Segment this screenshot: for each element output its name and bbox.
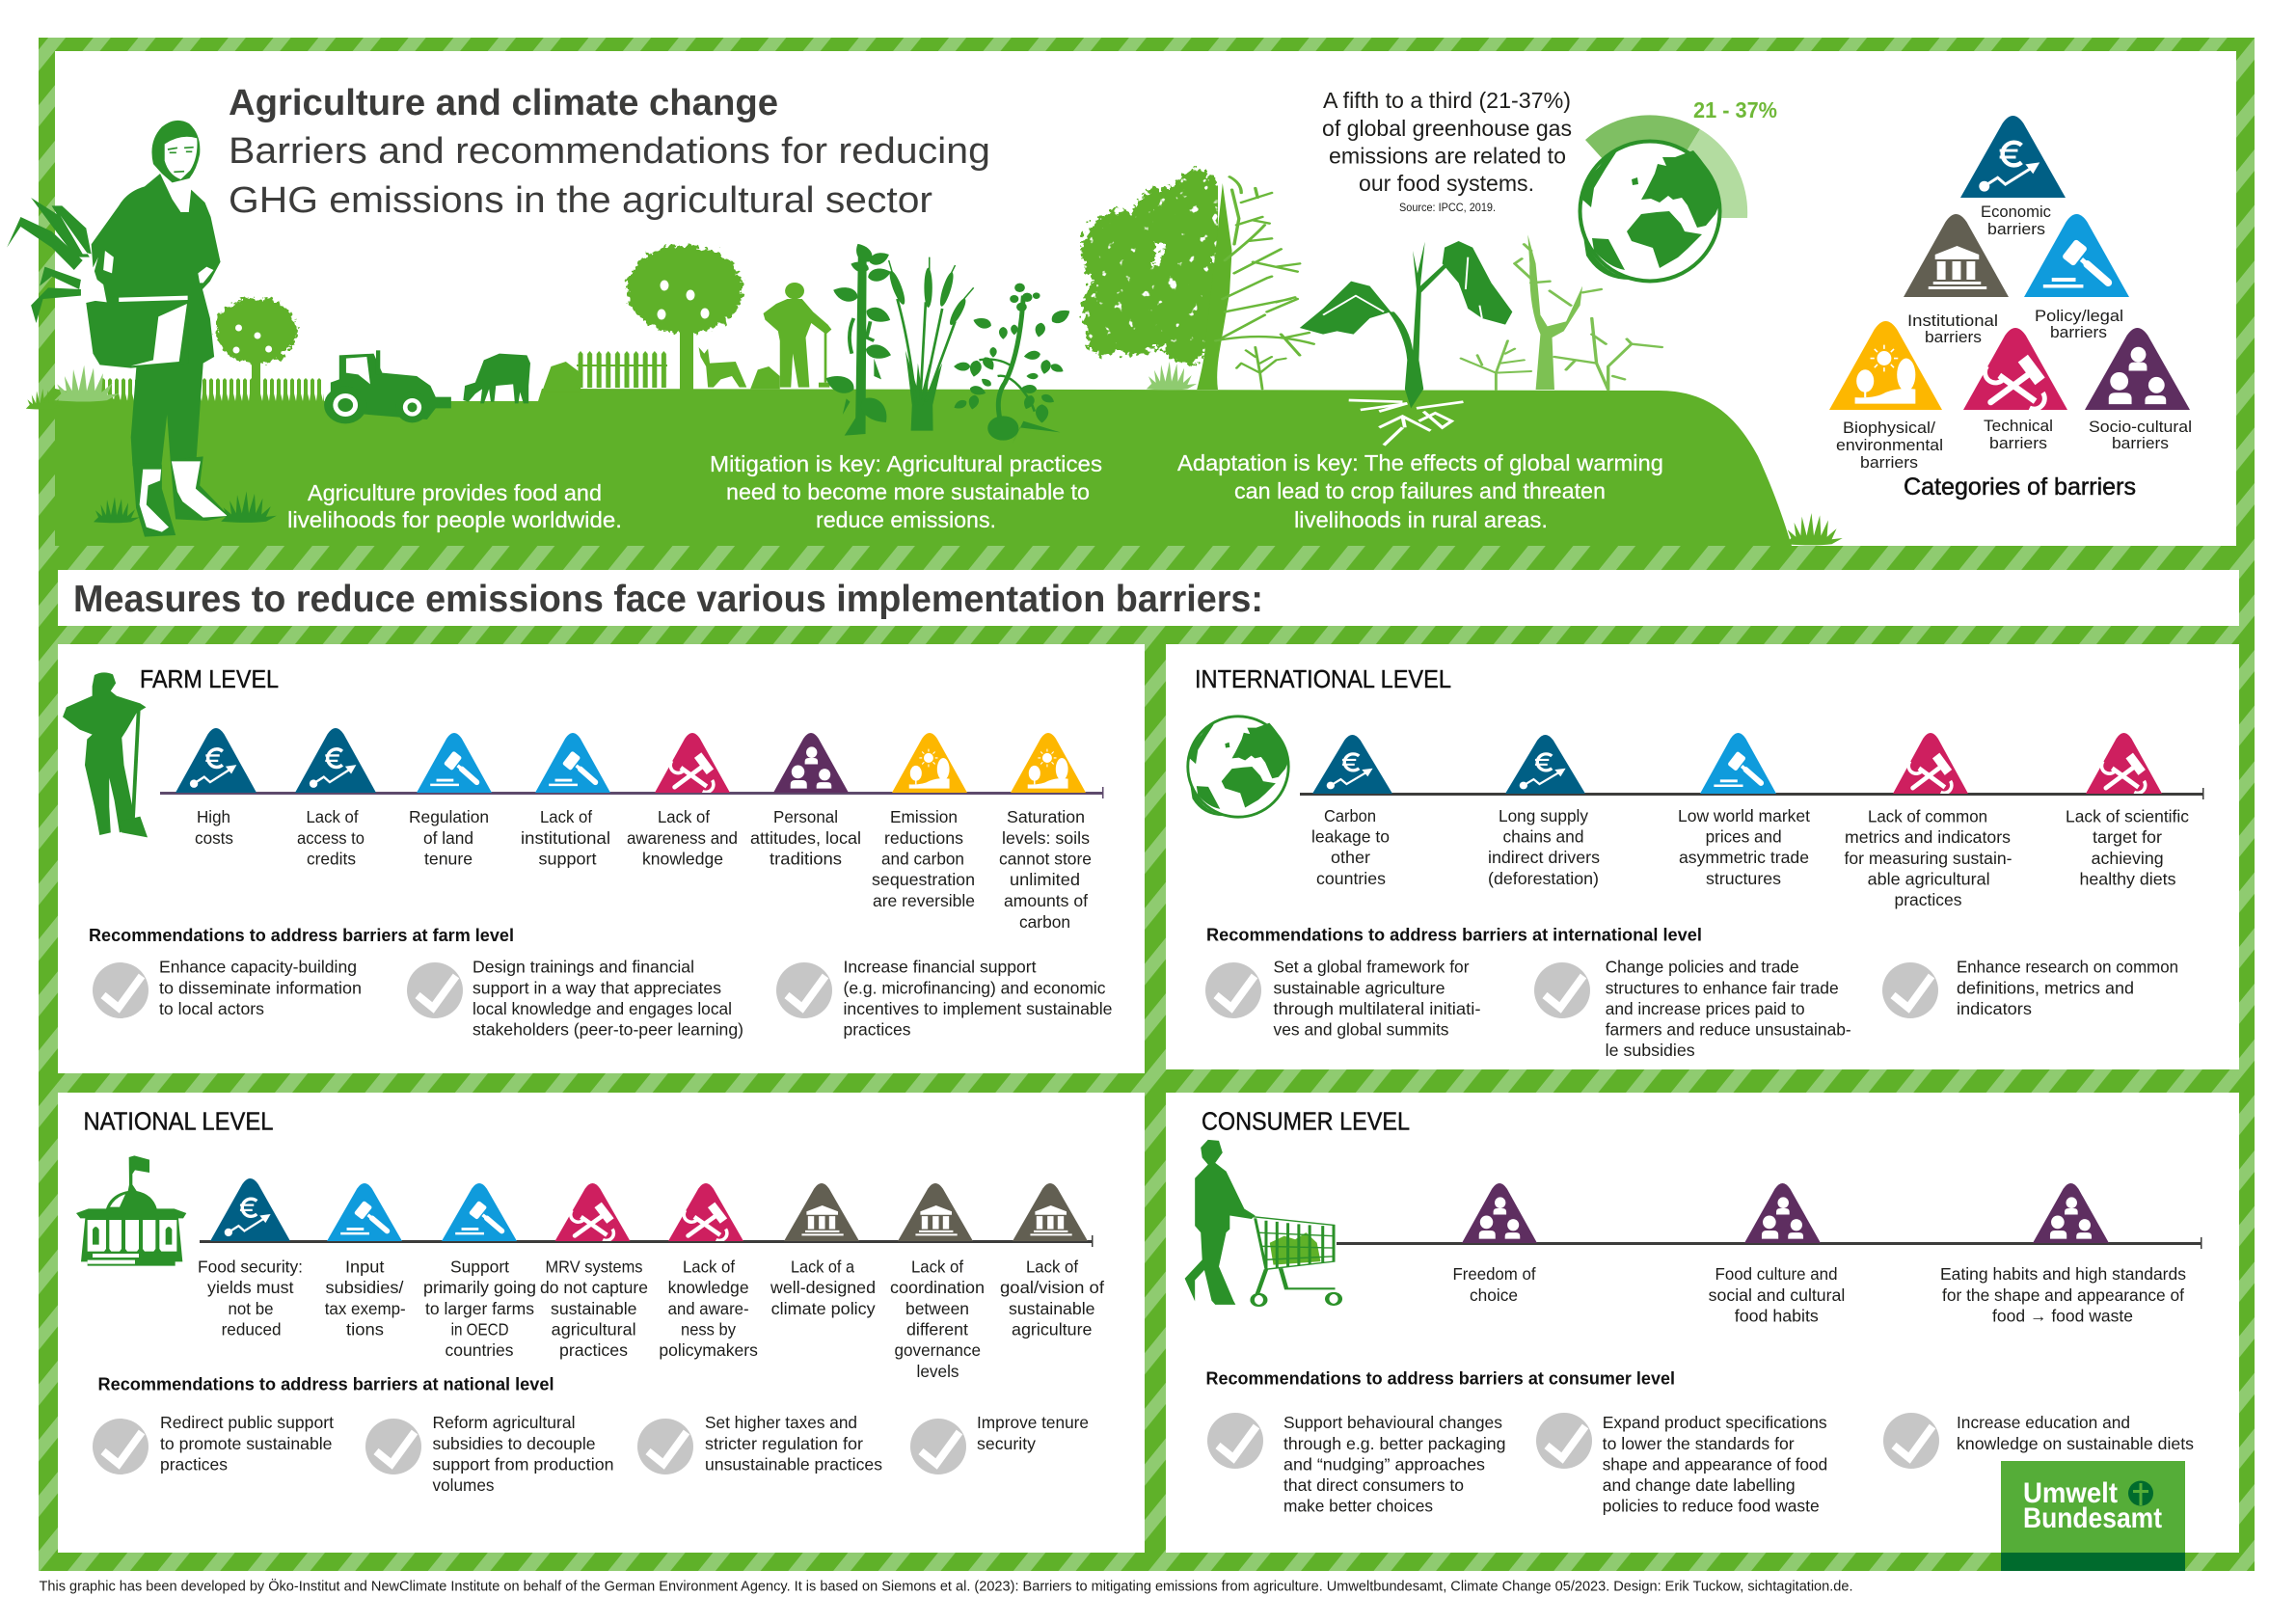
recommendation 3: stricter regulation for xyxy=(705,1434,863,1453)
hero title: GHG emissions in the agricultural sector xyxy=(229,180,932,221)
barrier: eating habits: food → food waste xyxy=(1992,1306,2133,1325)
deer, bushes and farmer xyxy=(542,283,831,392)
barrier: food security: not be xyxy=(228,1299,274,1318)
recommendation 2: farmers and reduce unsustainab- xyxy=(1606,1020,1851,1040)
barrier: coordination: levels xyxy=(916,1362,959,1381)
barrier: MRV systems xyxy=(540,1183,648,1360)
hero panel xyxy=(7,51,2236,546)
grass far left xyxy=(54,365,120,402)
barrier: coordination: coordination xyxy=(890,1278,985,1297)
recommendation 1 xyxy=(1205,957,1481,1040)
barrier: access to credits: Lack of xyxy=(307,807,359,826)
barrier: freedom of choice: Freedom of xyxy=(1452,1264,1536,1284)
timeline xyxy=(1300,788,2204,799)
barrier: freedom of choice: choice xyxy=(1470,1285,1518,1305)
caption: adaptation: livelihoods in rural areas. xyxy=(1294,507,1548,532)
barrier: reversible: sequestration xyxy=(872,870,975,889)
category: institutional xyxy=(1904,214,2009,346)
barrier: access to credits xyxy=(295,728,376,868)
recommendation 2: volumes xyxy=(432,1475,495,1495)
category: economic: barriers xyxy=(1987,221,2045,238)
recommendation 2: shape and appearance of food xyxy=(1603,1454,1827,1474)
small apple tree xyxy=(216,298,297,401)
barrier: support to larger farms: to larger farms xyxy=(425,1299,534,1318)
legend title: Categories of barriers xyxy=(1904,473,2136,500)
barrier: world market prices: Low world market xyxy=(1678,806,1810,825)
recommendation 3: (e.g. microfinancing) and economic xyxy=(843,978,1106,997)
caption: food and livelihoods: livelihoods for people worldwide. xyxy=(287,507,622,532)
icon: farmer with shovel xyxy=(63,672,148,837)
recommendation 1: Redirect public support xyxy=(160,1413,334,1432)
barrier: common metrics: metrics and indicators xyxy=(1845,827,2011,847)
caption: food and livelihoods: Agriculture provides food and xyxy=(308,480,602,505)
barrier: support to larger farms: primarily going xyxy=(423,1278,536,1297)
barrier: saturation: amounts of xyxy=(1004,891,1088,910)
footer credit: This graphic has been developed by Öko-Institut and NewClimate Institute on behalf of the German Environment Agency. It is based on Siemons et al. (2023): Barriers to mitigating emissions from agriculture. Umweltbundesamt, Climate Change 05/2023. Design: Erik Tuckow, sichtagitation.de. xyxy=(39,1578,1853,1595)
barrier: world market prices: prices and xyxy=(1706,827,1782,847)
barrier: reversible: and carbon xyxy=(881,849,964,868)
recommendation 2: to lower the standards for xyxy=(1603,1434,1795,1453)
barrier: access to credits: credits xyxy=(307,849,356,868)
barrier: goal or vision: agriculture xyxy=(1012,1320,1092,1339)
barrier: carbon leakage: countries xyxy=(1316,869,1386,888)
category: socio-cultural: barriers xyxy=(2112,435,2169,452)
category: biophysical: Biophysical/ xyxy=(1843,419,1935,437)
barrier: knowledge of policymakers: knowledge xyxy=(668,1278,749,1297)
barrier: institutional support: Lack of xyxy=(540,807,592,826)
barrier: support to larger farms xyxy=(423,1183,536,1360)
barrier: reversible: reductions xyxy=(884,828,963,848)
barrier: personal attitudes: attitudes, local xyxy=(750,828,861,848)
recommendations heading: Recommendations to address barriers at consumer level xyxy=(1205,1369,1675,1389)
recommendation 3 xyxy=(1883,1413,2194,1469)
recommendation 3 xyxy=(776,957,1113,1040)
recommendation 1: ves and global summits xyxy=(1273,1020,1449,1040)
statistic text: Source: IPCC, 2019. xyxy=(1399,201,1496,214)
wilting plant xyxy=(1300,241,1512,446)
heading: FARM LEVEL xyxy=(140,666,279,693)
category: institutional: Institutional xyxy=(1907,312,1998,330)
recommendations heading: Recommendations to address barriers at international level xyxy=(1206,926,1702,945)
hero title: Agriculture and climate change xyxy=(229,83,778,123)
recommendation 3: unsustainable practices xyxy=(705,1454,882,1474)
barrier: carbon leakage: leakage to xyxy=(1311,827,1390,847)
apple tree middle xyxy=(627,245,743,390)
caption: adaptation: can lead to crop failures and threaten xyxy=(1234,478,1606,503)
barrier: supply chains: (deforestation) xyxy=(1488,869,1599,888)
barrier: awareness: knowledge xyxy=(642,849,723,868)
grass at hill end xyxy=(1785,513,1843,545)
barrier: saturation: carbon xyxy=(1019,912,1070,932)
recommendation 2: structures to enhance fair trade xyxy=(1606,978,1839,997)
panel: consumer level xyxy=(1166,1093,2239,1553)
statistic text: emissions are related to xyxy=(1329,143,1566,168)
icon: parliament building xyxy=(76,1155,186,1266)
barrier: food culture: Food culture and xyxy=(1715,1264,1838,1284)
recommendation 2 xyxy=(365,1413,613,1495)
barrier: world market prices xyxy=(1678,733,1810,888)
big half-dead tree xyxy=(1082,169,1313,390)
category: biophysical: environmental xyxy=(1836,437,1943,454)
categories of barriers legend xyxy=(1829,116,2192,500)
category: technical: Technical xyxy=(1984,418,2053,435)
grass left edge xyxy=(26,389,63,410)
barrier: land tenure: of land xyxy=(423,828,473,848)
timeline xyxy=(1337,1237,2202,1249)
recommendations heading: Recommendations to address barriers at farm level xyxy=(89,926,514,945)
recommendation 3: Enhance research on common xyxy=(1957,957,2178,976)
barrier: institutional support: institutional xyxy=(521,828,610,848)
recommendation 1 xyxy=(1207,1413,1506,1515)
hero title: Barriers and recommendations for reducing xyxy=(229,131,990,172)
caption: adaptation: Adaptation is key: The effects of global warming xyxy=(1177,450,1663,475)
recommendation 1: through e.g. better packaging xyxy=(1283,1434,1506,1453)
barrier: institutional support xyxy=(521,733,610,868)
barrier: supply chains: chains and xyxy=(1502,827,1583,847)
barrier: knowledge of policymakers xyxy=(659,1183,758,1360)
barrier: food security: yields must xyxy=(207,1278,294,1297)
caption: mitigation xyxy=(710,451,1102,532)
barrier: access to credits: access to xyxy=(297,828,365,848)
barrier: goal or vision: sustainable xyxy=(1009,1299,1095,1318)
barrier: MRV systems: agricultural xyxy=(552,1320,636,1339)
barrier: common metrics xyxy=(1844,733,2012,909)
panel: international level xyxy=(1166,644,2239,1069)
heading: NATIONAL LEVEL xyxy=(83,1109,274,1136)
barrier: support to larger farms: in OECD xyxy=(451,1320,509,1339)
barrier: food security: Food security: xyxy=(198,1257,303,1276)
recommendation 2: stakeholders (peer-to-peer learning) xyxy=(473,1020,743,1040)
barrier: eating habits: for the shape and appearance of xyxy=(1942,1285,2184,1305)
barrier: scientific target: target for xyxy=(2093,827,2162,847)
barrier: reversible xyxy=(872,733,975,910)
caption: mitigation: Mitigation is key: Agricultural practices xyxy=(710,451,1102,476)
recommendation 1: to disseminate information xyxy=(159,978,362,997)
barrier: support to larger farms: countries xyxy=(446,1340,514,1360)
barrier: saturation: levels: soils xyxy=(1002,828,1090,848)
barrier: world market prices: asymmetric trade xyxy=(1679,848,1809,867)
barrier: carbon leakage xyxy=(1311,735,1392,888)
barrier: personal attitudes: traditions xyxy=(770,849,842,868)
barrier: MRV systems: sustainable xyxy=(551,1299,636,1318)
recommendation 1: and “nudging” approaches xyxy=(1283,1454,1485,1474)
ground hill xyxy=(55,389,1792,546)
category: technical xyxy=(1963,328,2067,452)
barrier: input subsidies: tax exemp- xyxy=(325,1299,406,1318)
hero title xyxy=(229,83,990,221)
barrier: supply chains: indirect drivers xyxy=(1488,848,1600,867)
recommendation 1: practices xyxy=(160,1454,228,1474)
fence left xyxy=(100,378,324,401)
barrier: high costs: High xyxy=(197,807,230,826)
wheat plant xyxy=(887,257,974,431)
barrier: food security xyxy=(198,1178,303,1339)
recommendation 1: make better choices xyxy=(1283,1496,1433,1515)
barrier: land tenure: tenure xyxy=(424,849,473,868)
barrier: personal attitudes xyxy=(750,733,861,868)
recommendation 4: Improve tenure xyxy=(977,1413,1089,1432)
barrier: personal attitudes: Personal xyxy=(773,807,838,826)
barrier: saturation xyxy=(999,733,1092,932)
recommendation 1: sustainable agriculture xyxy=(1273,978,1445,997)
barrier: common metrics: able agricultural xyxy=(1868,870,1990,889)
recommendation 2: policies to reduce food waste xyxy=(1603,1496,1820,1515)
recommendation 2: support from production xyxy=(432,1454,613,1474)
panel: national level xyxy=(58,1093,1145,1553)
barrier: reversible: Emission xyxy=(890,807,958,826)
recommendation 2: Expand product specifications xyxy=(1603,1413,1827,1432)
barrier: climate policy: climate policy xyxy=(771,1299,876,1318)
globe with share gauge: 21 - 37% xyxy=(1693,97,1777,122)
recommendation 3: Set higher taxes and xyxy=(705,1413,857,1432)
barrier: MRV systems: MRV systems xyxy=(546,1257,643,1276)
barrier: awareness xyxy=(627,733,738,868)
recommendation 2: local knowledge and engages local xyxy=(473,999,732,1018)
barrier: climate policy: Lack of a xyxy=(791,1257,854,1276)
barrier: goal or vision: goal/vision of xyxy=(1000,1278,1104,1297)
barrier: food security: reduced xyxy=(222,1320,282,1339)
caption: mitigation: need to become more sustainable to xyxy=(726,479,1090,504)
timeline xyxy=(200,1235,1094,1247)
recommendation 3: incentives to implement sustainable xyxy=(843,999,1113,1018)
barrier: eating habits xyxy=(1940,1183,2186,1325)
barrier: support to larger farms: Support xyxy=(450,1257,509,1276)
barrier: scientific target xyxy=(2066,733,2189,889)
barrier: climate policy: well-designed xyxy=(770,1278,876,1297)
barrier: food culture: social and cultural xyxy=(1709,1285,1845,1305)
fence middle xyxy=(577,351,667,388)
recommendation 3: Increase education and xyxy=(1957,1413,2130,1432)
barrier: awareness: awareness and xyxy=(627,828,738,848)
recommendation 3: definitions, metrics and xyxy=(1957,978,2134,997)
barrier: saturation: Saturation xyxy=(1007,807,1085,826)
bean plant xyxy=(822,241,894,436)
recommendation 1: Enhance capacity-building xyxy=(159,957,357,976)
barrier: knowledge of policymakers: ness by xyxy=(681,1320,736,1339)
category: economic xyxy=(1960,116,2066,238)
barrier: common metrics: for measuring sustain- xyxy=(1844,849,2012,868)
icon: globe xyxy=(1188,717,1288,817)
barrier: food culture xyxy=(1709,1183,1845,1325)
barrier: input subsidies: tions xyxy=(346,1320,384,1339)
barrier: knowledge of policymakers: and aware- xyxy=(668,1299,749,1318)
barrier: land tenure xyxy=(409,733,492,868)
recommendation 2: Reform agricultural xyxy=(432,1413,575,1432)
barrier: coordination: different xyxy=(906,1320,968,1339)
category: policy xyxy=(2024,214,2129,341)
recommendation 3: practices xyxy=(843,1020,911,1040)
category: socio-cultural: Socio-cultural xyxy=(2089,419,2192,436)
barrier: supply chains: Long supply xyxy=(1499,806,1588,825)
category: technical: barriers xyxy=(1989,435,2047,452)
recommendation 1: through multilateral initiati- xyxy=(1273,999,1481,1018)
barrier: MRV systems: practices xyxy=(559,1340,628,1360)
recommendation 2: Design trainings and financial xyxy=(473,957,694,976)
barrier: input subsidies xyxy=(325,1183,406,1339)
category: institutional: barriers xyxy=(1925,329,1982,346)
recommendation 1: Support behavioural changes xyxy=(1283,1413,1502,1432)
barrier: scientific target: healthy diets xyxy=(2079,870,2176,889)
barrier: coordination xyxy=(890,1183,985,1381)
recommendation 2: and increase prices paid to xyxy=(1606,999,1805,1018)
barrier: coordination: Lack of xyxy=(911,1257,963,1276)
recommendations heading: Recommendations to address barriers at national level xyxy=(98,1375,554,1394)
barrier: land tenure: Regulation xyxy=(409,807,489,826)
barrier: carbon leakage: other xyxy=(1331,848,1370,867)
cow xyxy=(463,354,530,403)
barrier: scientific target: Lack of scientific xyxy=(2066,806,2189,825)
barrier: awareness: Lack of xyxy=(658,807,710,826)
recommendation 2: le subsidies xyxy=(1606,1041,1695,1060)
barrier: goal or vision: Lack of xyxy=(1026,1257,1078,1276)
potato plant xyxy=(952,284,1073,444)
barrier: scientific target: achieving xyxy=(2092,849,2164,868)
woman farmer with bucket and crop xyxy=(7,121,229,537)
category: socio-cultural xyxy=(2085,328,2192,452)
icon: shopper with cart xyxy=(1185,1140,1340,1306)
recommendation 1: to promote sustainable xyxy=(160,1434,332,1453)
recommendation 1 xyxy=(93,957,362,1018)
band: section heading: Measures to reduce emissions face various implementation barriers: xyxy=(73,579,1263,620)
barrier: world market prices: structures xyxy=(1706,869,1781,888)
barrier: institutional support: support xyxy=(538,849,597,868)
recommendation 2: Change policies and trade xyxy=(1606,957,1799,976)
caption: mitigation: reduce emissions. xyxy=(816,507,996,532)
barrier: high costs xyxy=(176,728,257,848)
barrier: supply chains xyxy=(1488,735,1600,888)
logo: Umwelt Bundesamt: Bundesamt xyxy=(2023,1502,2162,1534)
panel: farm level xyxy=(58,644,1145,1073)
barrier: coordination: between xyxy=(905,1299,969,1318)
dead trees xyxy=(1461,234,1661,390)
caption: food and livelihoods xyxy=(287,480,622,532)
statistic text: our food systems. xyxy=(1359,171,1534,196)
barrier: common metrics: practices xyxy=(1894,890,1962,909)
recommendation 2: subsidies to decouple xyxy=(432,1434,596,1453)
statistic text: of global greenhouse gas xyxy=(1322,116,1572,141)
barrier: high costs: costs xyxy=(195,828,233,848)
statistic text xyxy=(1322,88,1572,214)
caption: adaptation xyxy=(1177,450,1663,532)
recommendation 3 xyxy=(637,1413,882,1474)
barrier: MRV systems: do not capture xyxy=(540,1278,648,1297)
heading: INTERNATIONAL LEVEL xyxy=(1195,666,1451,693)
category: biophysical xyxy=(1829,321,1943,472)
recommendation 1 xyxy=(93,1413,334,1474)
timeline xyxy=(160,787,1103,798)
category: biophysical: barriers xyxy=(1860,454,1918,472)
barrier: saturation: unlimited xyxy=(1010,870,1080,889)
category: policy: barriers xyxy=(2050,324,2107,341)
category: policy: Policy/legal xyxy=(2035,308,2123,325)
recommendation 3 xyxy=(1882,957,2178,1018)
recommendation 2 xyxy=(1536,1413,1827,1515)
grass tuft left of boots xyxy=(94,497,140,523)
recommendation 1: to local actors xyxy=(159,999,264,1018)
recommendation 2: support in a way that appreciates xyxy=(473,978,721,997)
barrier: coordination: governance xyxy=(895,1340,981,1360)
barrier: climate policy xyxy=(770,1183,876,1318)
barrier: eating habits: Eating habits and high standards xyxy=(1940,1264,2186,1284)
barrier: goal or vision xyxy=(1000,1183,1104,1339)
barrier: knowledge of policymakers: Lack of xyxy=(683,1257,735,1276)
recommendation 3: Increase financial support xyxy=(843,957,1037,976)
logo: Umwelt Bundesamt xyxy=(2001,1461,2185,1571)
barrier: knowledge of policymakers: policymakers xyxy=(659,1340,758,1360)
category: economic: Economic xyxy=(1981,203,2051,221)
recommendation 2 xyxy=(1534,957,1851,1060)
recommendation 3: indicators xyxy=(1957,999,2032,1018)
recommendation 2 xyxy=(407,957,743,1040)
tractor xyxy=(324,350,451,423)
barrier: common metrics: Lack of common xyxy=(1868,806,1987,825)
barrier: reversible: are reversible xyxy=(873,891,975,910)
globe with share gauge xyxy=(1580,97,1777,282)
recommendation 4 xyxy=(910,1413,1089,1474)
logo: Umwelt Bundesamt: Umwelt xyxy=(2023,1477,2118,1509)
heading: CONSUMER LEVEL xyxy=(1202,1109,1410,1136)
barrier: input subsidies: Input xyxy=(345,1257,385,1276)
barrier: carbon leakage: Carbon xyxy=(1324,806,1376,825)
grass near big tree xyxy=(1147,362,1197,390)
recommendation 2: and change date labelling xyxy=(1603,1475,1796,1495)
statistic text: A fifth to a third (21-37%) xyxy=(1323,88,1571,113)
recommendation 4: security xyxy=(977,1434,1036,1453)
barrier: saturation: cannot store xyxy=(999,849,1092,868)
barrier: freedom of choice xyxy=(1452,1183,1537,1305)
band: section heading xyxy=(58,570,2239,626)
recommendation 1: that direct consumers to xyxy=(1283,1475,1464,1495)
recommendation 3: knowledge on sustainable diets xyxy=(1957,1434,2194,1453)
barrier: input subsidies: subsidies/ xyxy=(326,1278,404,1297)
recommendation 1: Set a global framework for xyxy=(1273,957,1470,976)
barrier: food culture: food habits xyxy=(1735,1306,1819,1325)
grass tuft right of boots xyxy=(221,492,277,523)
